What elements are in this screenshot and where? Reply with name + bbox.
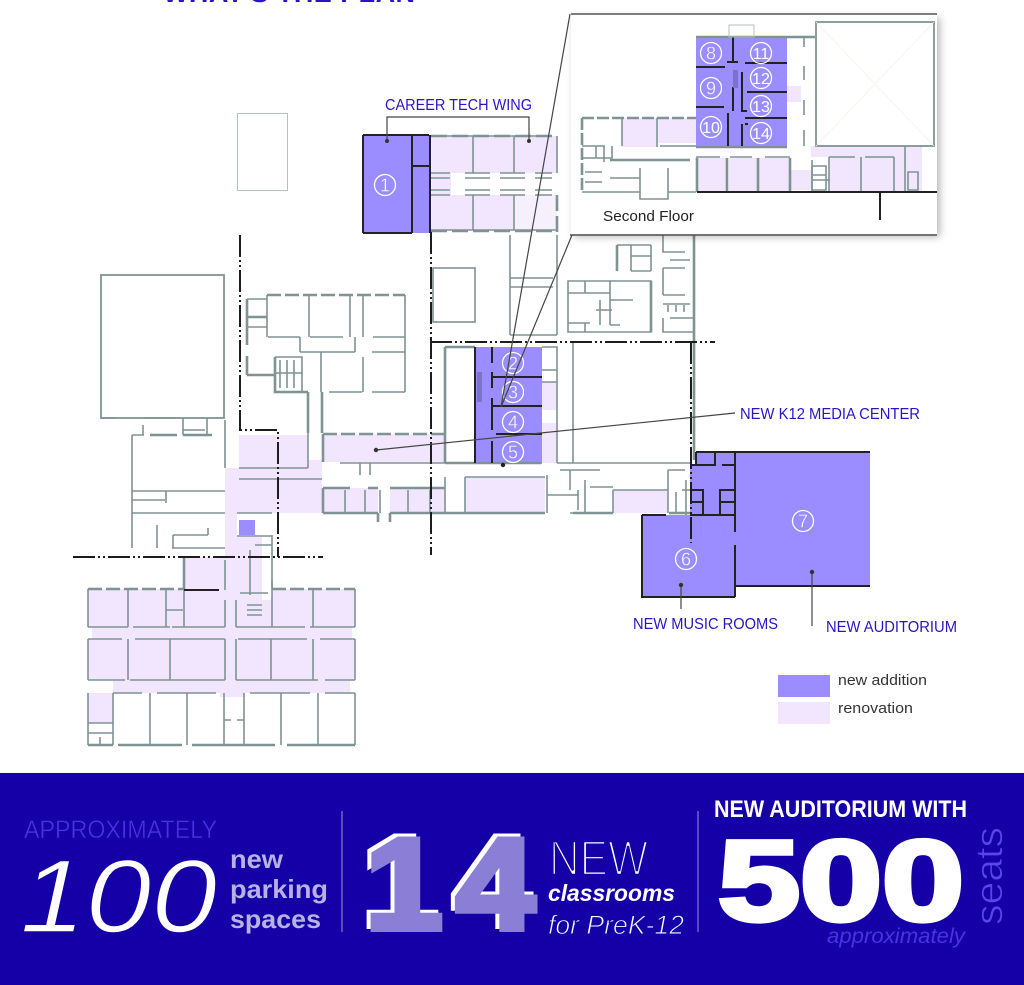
callout: new auditorium [810,570,957,636]
room 2: 2 [508,354,518,374]
room 14: 14 [752,126,770,143]
second floor new classrooms [696,37,787,146]
callout: career tech wing [385,97,532,143]
callout: career tech wing: CAREER TECH WING [385,97,532,114]
stat: 100 parking spaces: parking [230,874,328,904]
renovation areas [88,136,668,723]
stat: 100 parking spaces: spaces [230,904,321,934]
panel: statistics band [0,773,1024,985]
floor plan: first floor [73,114,870,745]
room 7 [792,510,814,532]
stat: 500 seat auditorium [714,796,1011,948]
room 3 [502,382,524,402]
stat: 14 new classrooms: for PreK-12 [548,910,684,940]
building walls [88,136,694,745]
legend: new addition [778,672,927,697]
stat: 500 seat auditorium: seats [969,827,1011,925]
room 1 [374,174,396,196]
new addition areas [239,135,870,597]
stat: 500 seat auditorium: 500 [718,818,964,945]
stat: 14 new classrooms: 1 [361,808,439,954]
stat: 100 parking spaces: new [230,844,284,874]
legend: renovation [778,700,913,724]
room 5 [502,442,524,462]
stat: 14 new classrooms: NEW [549,832,649,886]
divider [341,811,343,932]
stat: 14 new classrooms: 1 [365,811,443,957]
room 8: 8 [706,44,716,64]
room 1: 1 [380,176,390,196]
callout: new music rooms: NEW MUSIC ROOMS [633,616,778,633]
stat: 100 parking spaces: 100 [20,839,217,955]
callout: new k12 media center [374,406,920,467]
stat: 500 seat auditorium: approximately [827,925,967,948]
callout: new music rooms [633,583,778,633]
room 4: 4 [508,412,518,432]
vertical and horizontal phase lines [73,232,715,557]
room 10: 10 [702,120,720,137]
stat: 14 new classrooms: 4 [452,808,531,954]
panel: second floor inset [571,15,937,234]
room 12: 12 [752,71,770,88]
stat: 100 parking spaces: APPROXIMATELY [24,816,217,844]
inset background [571,15,937,234]
legend: renovation: renovation [838,700,913,717]
legend: new addition: new addition [838,672,927,689]
room 5: 5 [508,442,518,462]
callout: new k12 media center: NEW K12 MEDIA CENTER [740,406,920,423]
second floor walls [582,25,937,220]
room 13: 13 [752,99,770,116]
room numbers 1 to 7 [374,174,814,570]
walls inside new additions [363,135,870,597]
second floor renovation rooms [622,86,922,192]
room 7: 7 [798,512,808,532]
room 2 [502,352,524,374]
callout: new auditorium: NEW AUDITORIUM [826,619,957,636]
stat: 14 new classrooms: 4 [456,811,535,957]
band background [0,773,1024,985]
room 6 [676,548,696,570]
room 9: 9 [706,78,716,98]
room 3: 3 [508,382,518,402]
stat: 14 new classrooms [361,808,684,957]
room 6: 6 [681,550,691,570]
inset leader lines [501,14,937,407]
divider [697,811,699,932]
legend [778,672,927,724]
gymnasium [101,275,224,418]
room 11: 11 [753,46,769,63]
stat: 100 parking spaces [20,816,328,955]
room 4 [502,412,524,432]
second floor gymnasium [816,22,934,146]
stat: 500 seat auditorium: NEW AUDITORIUM WITH [714,796,967,823]
second floor label: Second Floor [603,208,694,225]
outline of parking area [238,114,288,190]
room numbers 8 to 14 [700,42,772,144]
stat: 14 new classrooms: classrooms [548,880,675,906]
